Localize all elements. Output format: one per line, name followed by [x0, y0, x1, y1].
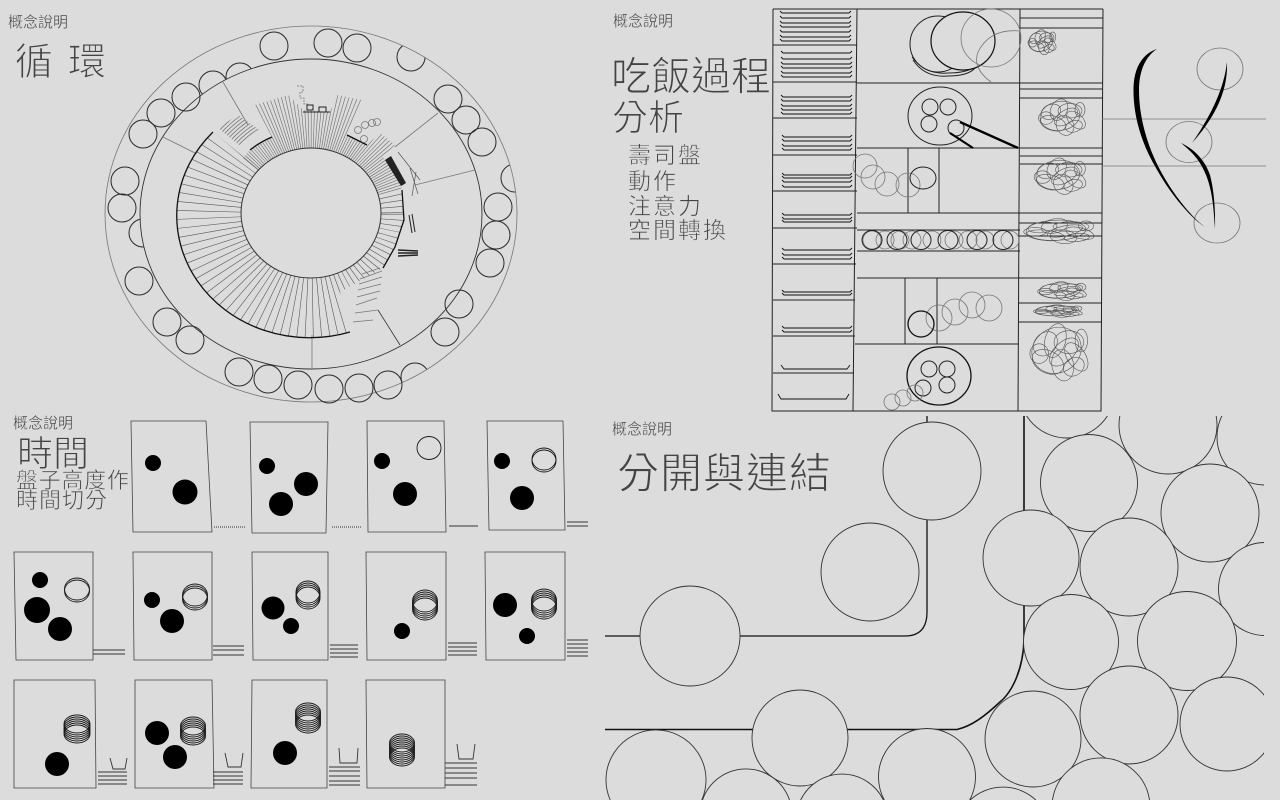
scribbles	[1023, 27, 1099, 386]
staggered lines lower right	[353, 268, 382, 322]
moving dish sequence 1	[853, 154, 936, 197]
spokes	[163, 82, 475, 368]
dark hatched bar	[385, 156, 406, 186]
inner circle	[241, 148, 381, 278]
panel: 循環 cycle	[8, 13, 529, 403]
list: 壽司盤	[628, 142, 703, 168]
arcs fan	[218, 116, 258, 145]
middle ellipse	[140, 59, 482, 369]
outer ring circles	[108, 29, 512, 403]
panel: 時間	[13, 414, 588, 788]
panel: 分開與連結	[605, 416, 1264, 800]
small circles	[354, 118, 380, 142]
plate stack lines	[778, 11, 852, 399]
heading: 吃飯過程: 吃飯過程	[611, 55, 771, 99]
outer ellipse	[105, 26, 517, 402]
list: 空間轉換	[628, 217, 728, 243]
moving dish sequence 2	[908, 292, 1002, 337]
plate with dishes and chopsticks	[908, 87, 1018, 148]
belt of dishes	[862, 230, 1019, 250]
small marks top	[303, 105, 330, 112]
panel: 吃飯過程分析	[611, 9, 1266, 411]
list: 注意力	[628, 193, 703, 219]
subheading: 盤子高度作	[16, 468, 129, 493]
label: concept note: 概念說明	[612, 420, 672, 438]
side diagram with ink strokes	[1102, 48, 1266, 243]
side height bars	[93, 522, 588, 785]
heading: 分開與連結: 分開與連結	[617, 450, 831, 497]
list	[628, 142, 728, 243]
connecting line right	[605, 416, 1024, 730]
radial lines: main ring	[178, 133, 404, 337]
right marks	[398, 152, 420, 256]
stair marks	[297, 86, 308, 104]
heading: 分析: 分析	[612, 97, 684, 138]
circles	[606, 416, 1264, 800]
plate bottom	[884, 347, 971, 410]
heading: 時間: 時間	[17, 433, 89, 474]
top plates	[910, 9, 1021, 82]
table grid	[772, 9, 1103, 411]
radial lines: dense upper sector	[243, 95, 404, 195]
label: concept note: 概念說明	[13, 414, 73, 432]
subheading	[16, 468, 129, 513]
label: concept note: 概念說明	[613, 12, 673, 30]
heading: 循環: 循環	[15, 42, 121, 84]
label: concept note: 概念說明	[8, 13, 68, 31]
subheading: 時間切分	[16, 488, 107, 513]
list: 動作	[628, 168, 678, 194]
stacked plate rings	[64, 436, 556, 766]
connecting line left	[605, 416, 927, 636]
black dots	[24, 453, 535, 776]
thick rim arcs	[177, 132, 404, 338]
frames	[14, 421, 565, 788]
outer ring circles, cut by ellipses	[129, 43, 529, 391]
